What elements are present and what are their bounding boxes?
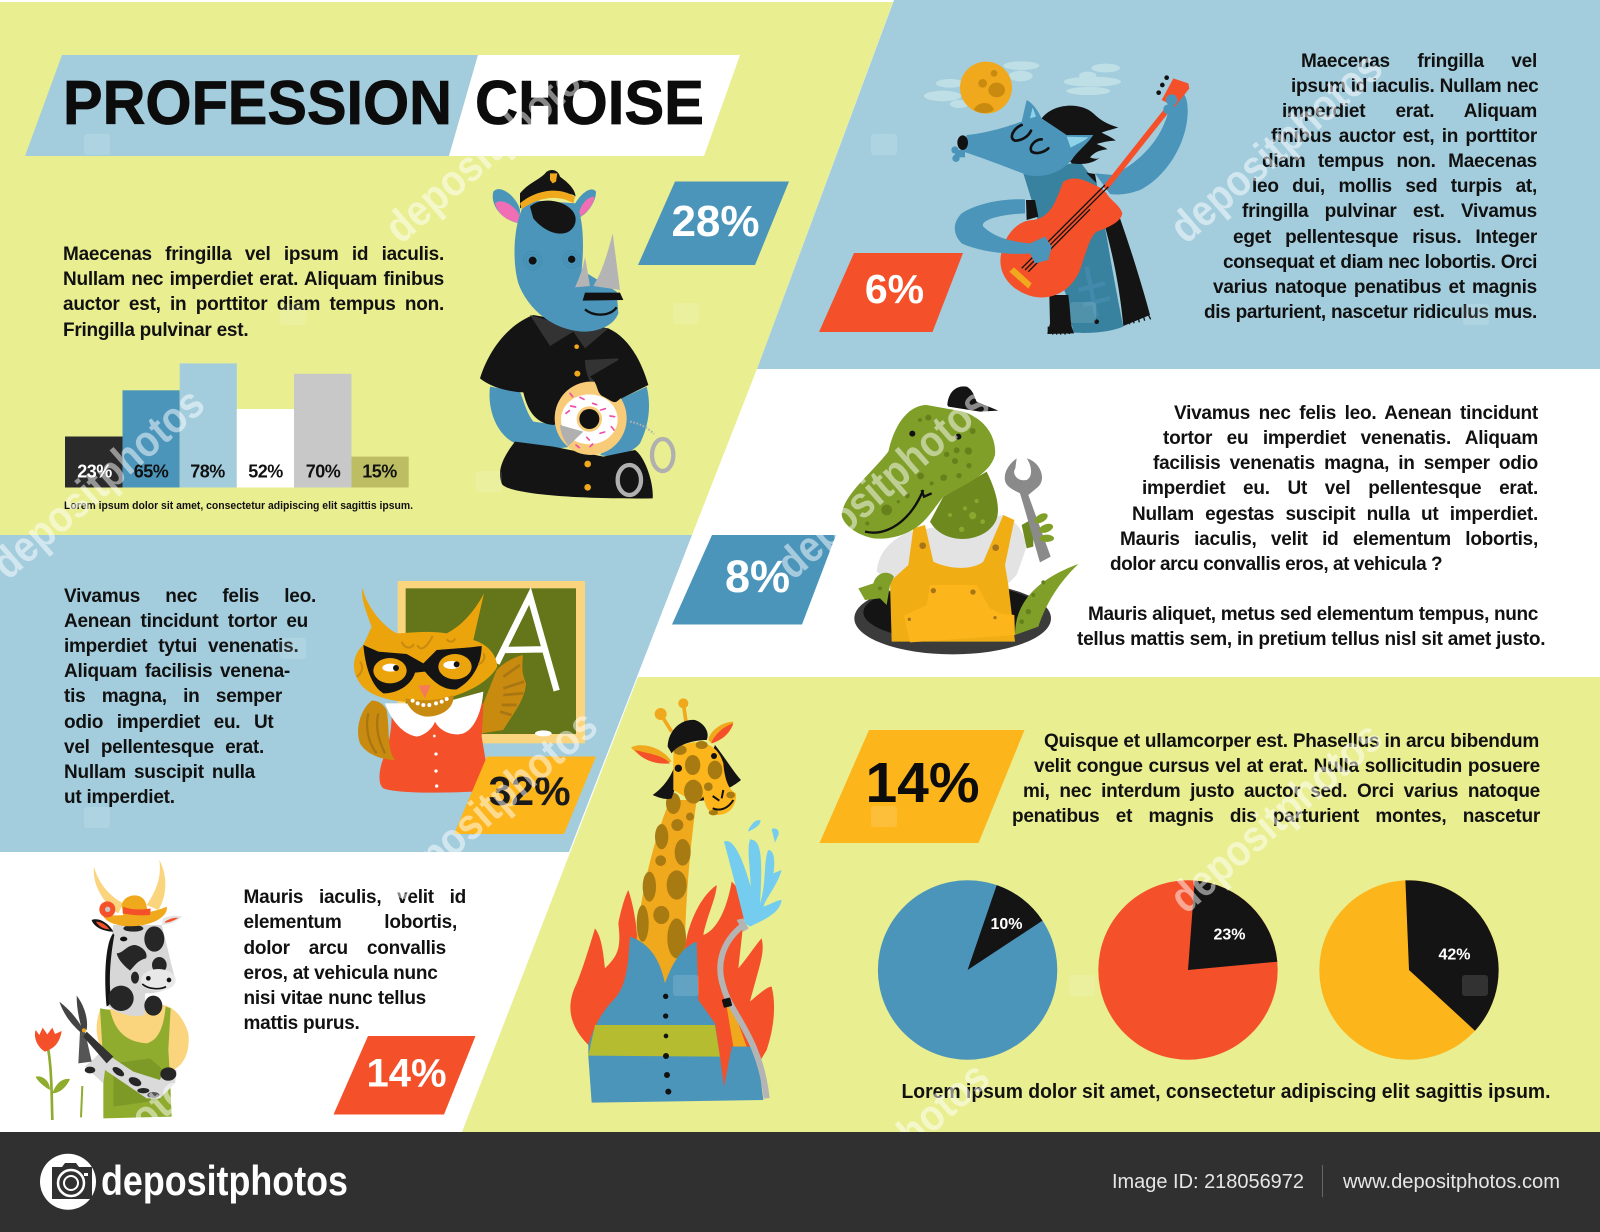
text: rhino paragraph: Maecenas fringilla vel ipsum id iaculis. <box>63 244 444 265</box>
text: crocodile paragraph: facilisis venenatis magna, in semper odio <box>1153 453 1538 474</box>
footer logo wordmark: depositphotos <box>101 1157 348 1204</box>
bar chart: 23% <box>77 462 112 482</box>
text: owl paragraph: vel pellentesque erat. <box>64 737 264 758</box>
pie chart: 10%: 10% <box>990 916 1023 933</box>
badge: 14% amber <box>820 730 1024 843</box>
text: owl paragraph: Nullam suscipit nulla <box>64 762 255 783</box>
title banner: PROFESSION <box>63 69 452 138</box>
owl teacher <box>354 581 585 793</box>
bar chart: 70% <box>306 462 341 482</box>
text: rhino paragraph: auctor est, in porttitor diam tempus non. <box>63 294 444 315</box>
badge: 14% orange <box>334 1036 476 1114</box>
bar chart <box>65 363 409 488</box>
text: crocodile paragraph: Mauris iaculis, velit id elementum lobortis, <box>1120 529 1538 550</box>
text: cow paragraph: dolor arcu convallis <box>244 938 446 959</box>
pie chart: 42% <box>1319 880 1499 1060</box>
badge: 32%: 32% <box>488 768 571 814</box>
stock watermark overlay: depositphotos <box>375 42 607 253</box>
footer logo icon <box>40 1154 96 1210</box>
text: giraffe paragraph: mi, nec interdum justo auctor sed. Orci varius natoque <box>1023 781 1540 802</box>
text: wolf paragraph: fringilla pulvinar est. Vivamus <box>1242 201 1537 222</box>
text: owl paragraph: Aenean tincidunt tortor eu <box>64 611 308 632</box>
badge: 28% <box>638 182 789 265</box>
stock watermark overlay: depositphotos <box>375 700 607 911</box>
badge: 28%: 28% <box>671 197 760 246</box>
stock watermark overlay: depositphotos <box>767 378 999 589</box>
text: crocodile paragraph: Vivamus nec felis leo. Aenean tincidunt <box>1174 403 1538 424</box>
text: cow paragraph <box>244 887 466 1034</box>
text: crocodile paragraph: Mauris aliquet, metus sed elementum tempus, nunc <box>1088 604 1538 625</box>
stock watermark overlay <box>0 58 1382 1132</box>
text: cow paragraph: Mauris iaculis, velit id <box>244 887 466 908</box>
text: owl paragraph: Aliquam facilisis venena- <box>64 661 290 682</box>
rhino police officer <box>480 170 673 498</box>
text: cow paragraph: nisi vitae nunc tellus <box>244 988 426 1009</box>
cow gardener <box>35 860 189 1120</box>
badge: 8% <box>672 535 836 624</box>
badge: 14% amber: 14% <box>865 751 980 815</box>
stock watermark overlay: depositphotos <box>1160 42 1392 253</box>
faint camera marks <box>84 134 1489 996</box>
title banner: CHOISE <box>475 69 704 138</box>
text: wolf paragraph: imperdiet erat. Aliquam <box>1282 101 1537 122</box>
title banner <box>25 55 740 156</box>
text: crocodile paragraph: dolor arcu convallis eros, at vehicula ? <box>1110 554 1442 575</box>
text: giraffe paragraph: Quisque et ullamcorper est. Phasellus in arcu bibendum <box>1044 731 1539 752</box>
text: owl paragraph: odio imperdiet eu. Ut <box>64 712 274 733</box>
text: cow paragraph: eros, at vehicula nunc <box>244 963 438 984</box>
badge: 14% orange: 14% <box>366 1052 447 1096</box>
bar chart: 15% <box>362 462 397 482</box>
text: giraffe paragraph: velit congue cursus vel at erat. Nulla sollicitudin posuere <box>1034 756 1540 777</box>
text: crocodile paragraph: imperdiet eu. Ut vel pellentesque erat. <box>1142 478 1538 499</box>
text: crocodile paragraph: Nullam egestas suscipit nulla ut imperdiet. <box>1132 504 1538 525</box>
bar chart: 52% <box>248 462 283 482</box>
text: wolf paragraph: finibus auctor est, in porttitor <box>1271 126 1537 147</box>
wolf guitarist <box>924 61 1189 335</box>
text: giraffe paragraph <box>1012 731 1540 827</box>
giraffe firefighter <box>570 698 782 1103</box>
text: wolf paragraph: dis parturient, nascetur ridiculus mus. <box>1204 302 1537 323</box>
text: giraffe paragraph: penatibus et magnis dis parturient montes, nascetur <box>1012 806 1540 827</box>
text: wolf paragraph: diam tempus non. Maecenas <box>1262 151 1537 172</box>
text: wolf paragraph: varius natoque penatibus et magnis <box>1213 277 1537 298</box>
pie chart caption: Lorem ipsum dolor sit amet, consectetur adipiscing elit sagittis ipsum. <box>902 1081 1550 1103</box>
text: wolf paragraph: Maecenas fringilla vel <box>1301 50 1537 72</box>
text: owl paragraph <box>64 586 316 808</box>
text: wolf paragraph: ipsum id iaculis. Nullam nec <box>1291 76 1538 97</box>
text: crocodile paragraph: tortor eu imperdiet venenatis. Aliquam <box>1163 428 1538 449</box>
bar chart: 78% <box>190 462 225 482</box>
text: wolf paragraph: leo dui, mollis sed turpis at, <box>1252 176 1537 197</box>
text: rhino paragraph: Fringilla pulvinar est. <box>63 320 248 341</box>
pie chart: 42%: 42% <box>1438 946 1471 964</box>
text: wolf paragraph: consequat et diam nec lobortis. Orci <box>1223 252 1537 273</box>
panel: middle-left blue <box>0 535 692 852</box>
panel: right white <box>638 369 1600 677</box>
text: owl paragraph: Vivamus nec felis leo. <box>64 586 316 607</box>
text: owl paragraph: ut imperdiet. <box>64 787 175 808</box>
text: crocodile paragraph <box>1077 403 1545 650</box>
badge: 32% <box>454 756 596 834</box>
crocodile mechanic <box>842 386 1078 654</box>
text: wolf paragraph <box>1204 50 1538 323</box>
badge: 6% <box>819 253 963 332</box>
text: wolf paragraph: eget pellentesque risus. Integer <box>1233 227 1537 248</box>
text: owl paragraph: tis magna, in semper <box>64 686 282 707</box>
text: cow paragraph: elementum lobortis, <box>244 912 457 933</box>
text: cow paragraph: mattis purus. <box>244 1013 360 1034</box>
pie chart: 23% <box>1098 880 1278 1060</box>
pie chart: 10% <box>878 880 1057 1060</box>
bar chart: 65% <box>134 462 169 482</box>
panel: top-left yellow <box>0 2 893 535</box>
website: www.depositphotos.com <box>1342 1171 1560 1193</box>
badge: 6%: 6% <box>865 266 924 312</box>
text: crocodile paragraph: tellus mattis sem, in pretium tellus nisl sit amet justo. <box>1077 629 1545 650</box>
panel: lower-right yellow <box>462 677 1600 1132</box>
badge: 8%: 8% <box>725 551 790 602</box>
bar chart caption: Lorem ipsum dolor sit amet, consectetur adipiscing elit sagittis ipsum. <box>64 500 413 512</box>
text: owl paragraph: imperdiet tytui venenatis. <box>64 636 298 657</box>
stock watermark overlay: depositphotos <box>1160 712 1392 923</box>
image id: Image ID: 218056972 <box>1112 1171 1304 1193</box>
panel: lower-left white <box>0 852 569 1132</box>
text: rhino paragraph <box>63 244 444 341</box>
pie chart: 23%: 23% <box>1213 926 1246 944</box>
footer bar <box>0 1132 1600 1232</box>
text: rhino paragraph: Nullam nec imperdiet erat. Aliquam finibus <box>63 269 444 290</box>
panel: top-right blue <box>757 0 1600 369</box>
